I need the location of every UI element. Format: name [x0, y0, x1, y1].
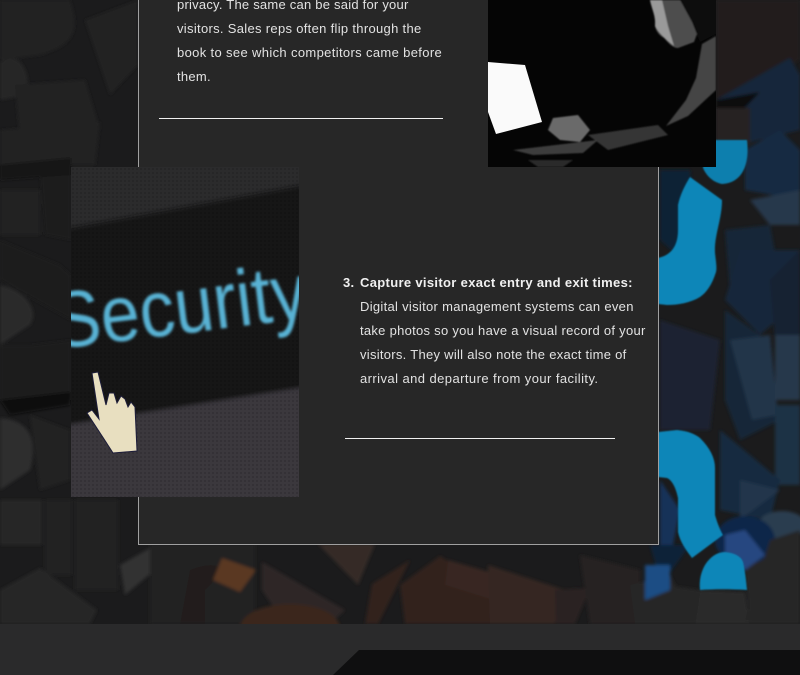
- bottom strip shapes: [150, 544, 255, 624]
- text block: item 3: Capture visitor exact entry and exit times:: [360, 275, 633, 290]
- text block: item 2 ending: book to see which competitors came before: [177, 45, 442, 60]
- text block: item 3: 3.: [343, 275, 355, 290]
- icon: pointer cursor: [87, 372, 137, 453]
- photo: security screen with cursor: [71, 167, 299, 497]
- text block: item 3: arrival and departure from your facility.: [360, 371, 598, 386]
- left column shapes: [0, 0, 75, 60]
- text block: item 2 ending: [177, 0, 442, 84]
- photo: man at laptop: [488, 0, 716, 167]
- text block: item 2 ending: them.: [177, 69, 211, 84]
- text block: item 3: Digital visitor management systems can even: [360, 299, 634, 314]
- text block: item 3: [343, 275, 646, 386]
- divider 1: [159, 118, 443, 119]
- right column shapes: [716, 0, 800, 110]
- blue glowing question marks: [658, 140, 748, 590]
- text block: item 3: take photos so you have a visual record of your: [360, 323, 646, 338]
- text block: item 2 ending: visitors. Sales reps often flip through the: [177, 21, 422, 36]
- divider 2: [345, 438, 615, 439]
- footer band: [0, 624, 800, 675]
- text block: item 3: visitors. They will also note the exact time of: [360, 347, 627, 362]
- content panel: [138, 0, 659, 545]
- footer dark shape: [333, 650, 800, 675]
